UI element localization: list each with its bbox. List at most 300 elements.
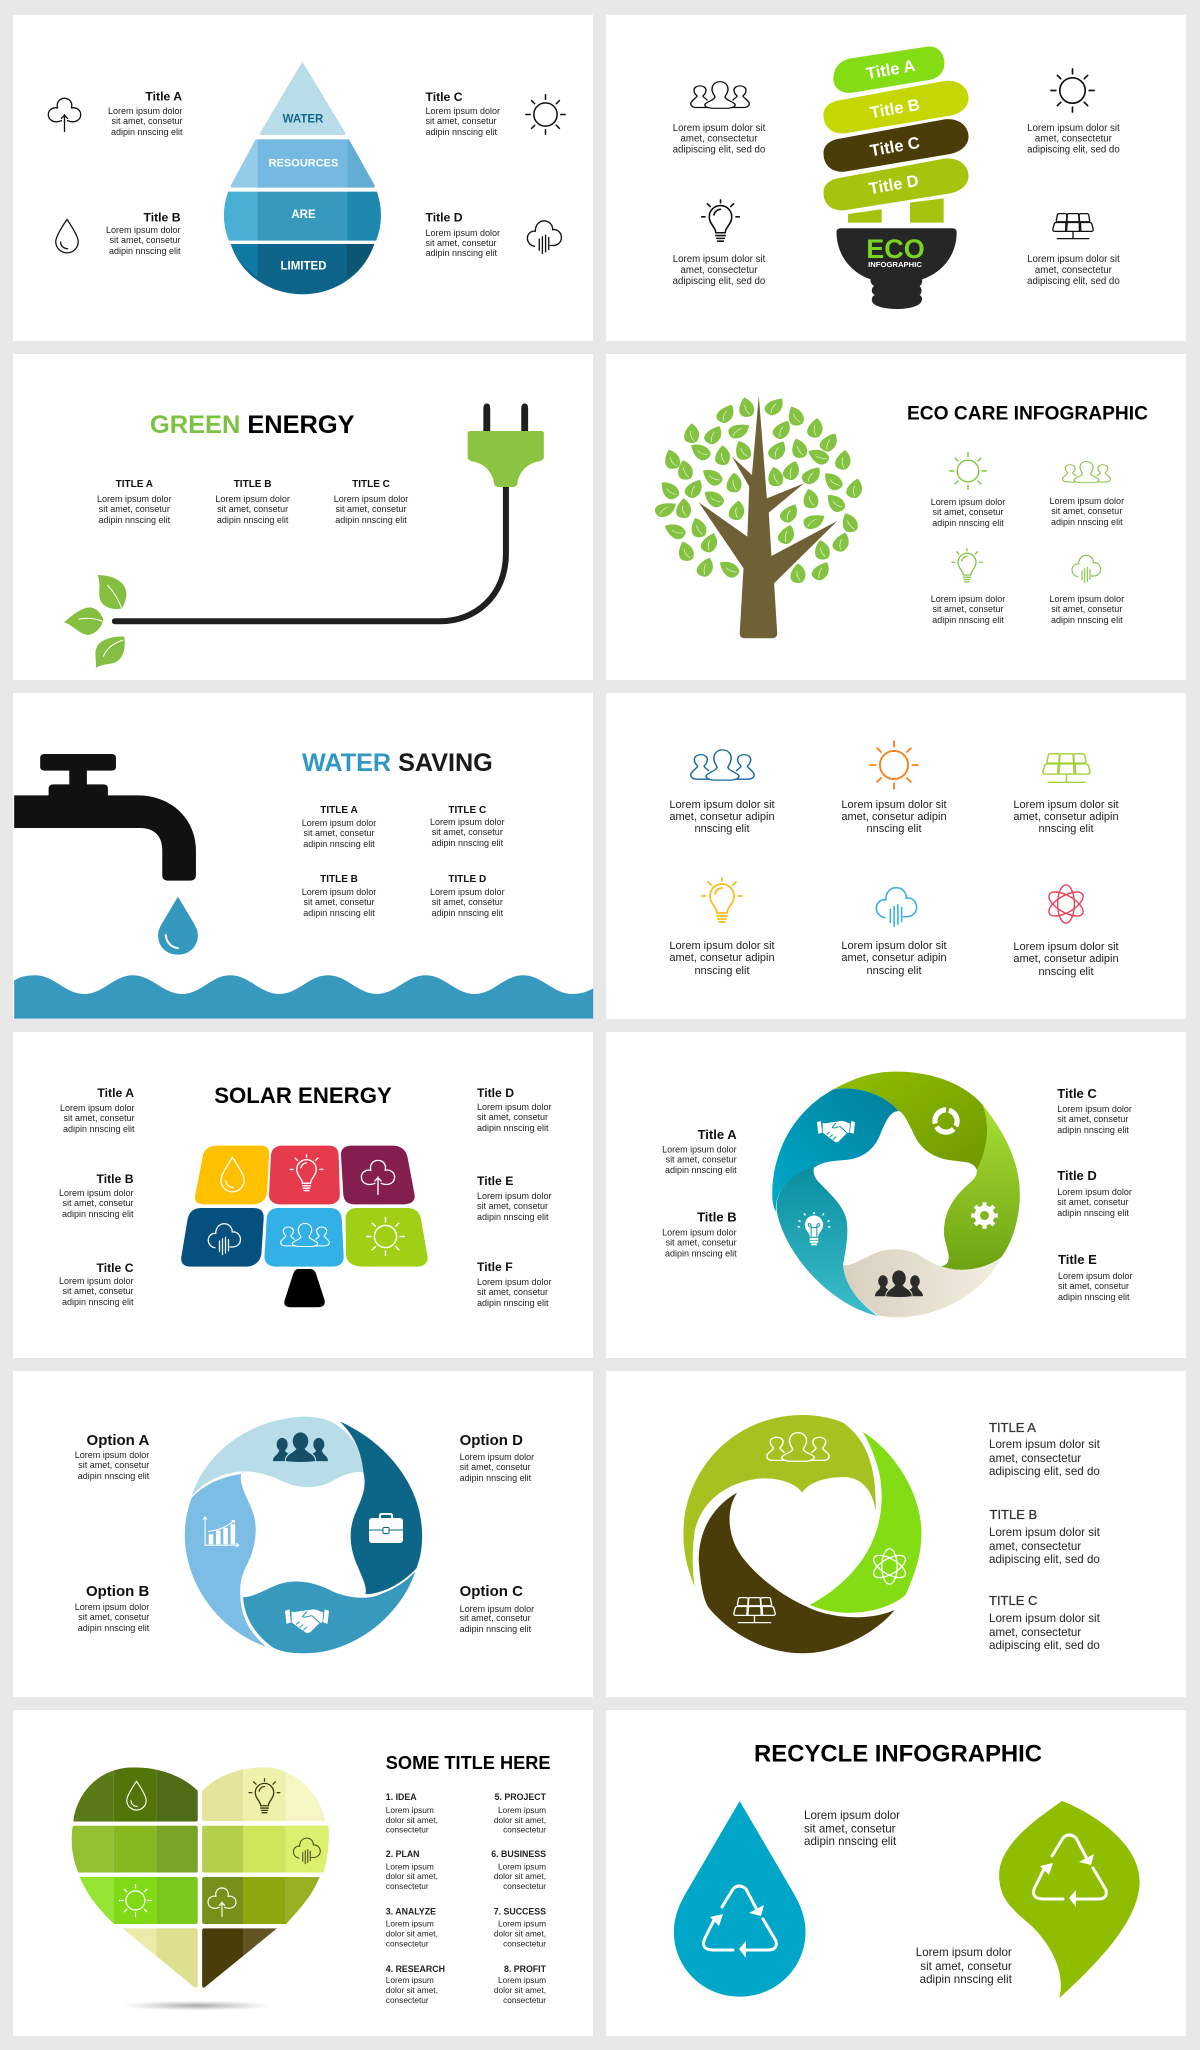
panel: colored icon grid	[606, 693, 1186, 1019]
list item 4: consectetur	[386, 1995, 429, 2005]
blue drop and green leaf shapes	[674, 1801, 1140, 1998]
icon: handshake	[817, 1121, 855, 1142]
panel: star ring	[606, 1032, 1186, 1358]
text: Title D	[1057, 1168, 1132, 1218]
text: Title A: sit amet, consetur	[99, 504, 170, 514]
list item 5: dolor sit amet,	[494, 1815, 546, 1825]
text: Title D: adipin nnscing elit	[477, 1123, 549, 1133]
list item 4: 4. RESEARCH	[386, 1964, 445, 1974]
panel: heart blocks	[13, 1710, 593, 2036]
text: Title B: sit amet, consetur	[109, 235, 181, 245]
text: Option B: sit amet, consetur	[78, 1612, 149, 1622]
text: Title D: adipin nnscing elit	[1057, 1208, 1129, 1218]
text: Title B	[662, 1210, 737, 1258]
list item 4	[386, 1964, 445, 2005]
text: Title A: Lorem ipsum dolor	[662, 1144, 737, 1154]
text: TITLE C	[989, 1593, 1101, 1652]
text: Title C: Lorem ipsum dolor	[334, 494, 408, 504]
text: Option D: Option D	[460, 1432, 523, 1449]
text: Title C	[59, 1261, 134, 1307]
text: Title A: adipin nnscing elit	[111, 127, 183, 137]
text: cloud block: adipin nnscing elit	[1051, 615, 1123, 625]
text: Option C: sit amet, consetur	[460, 1613, 531, 1623]
text: top left: amet, consectetur	[680, 134, 758, 145]
spiral bulb diagram: Title B	[869, 96, 921, 122]
text: Title B: TITLE B	[234, 479, 271, 490]
text: Title C	[334, 479, 408, 525]
spiral bulb diagram: ECO	[866, 234, 925, 264]
list item 3: consectetur	[386, 1938, 429, 1948]
icon: handshake	[285, 1609, 329, 1633]
text: Title E: Title E	[477, 1174, 513, 1188]
panel: eco care tree	[606, 354, 1186, 680]
text: drop caption: adipin nnscing elit	[804, 1835, 897, 1848]
text: TITLE A: TITLE A	[989, 1420, 1036, 1435]
text: Title B	[106, 210, 181, 256]
text: Title B: Title B	[96, 1172, 134, 1186]
text: people block: Lorem ipsum dolor	[1050, 496, 1124, 506]
text: Title C: sit amet, consetur	[62, 1286, 134, 1296]
text: bottom right: amet, consectetur	[1035, 265, 1113, 276]
four segment ring	[185, 1417, 422, 1653]
text: Title B: adipin nnscing elit	[62, 1209, 134, 1219]
text: Title B	[302, 874, 376, 918]
text: bottom left: Lorem ipsum dolor sit	[673, 254, 766, 265]
text: Title B: adipin nnscing elit	[217, 515, 289, 525]
text: bulb block: sit amet, consetur	[932, 604, 1004, 614]
text: Option B	[75, 1583, 150, 1633]
text: Title D: Title D	[1057, 1168, 1097, 1183]
text: Title A: adipin nnscing elit	[303, 839, 375, 849]
text: Option D: adipin nnscing elit	[460, 1473, 532, 1483]
text: Title C: Lorem ipsum dolor	[426, 106, 500, 116]
text: Title C: adipin nnscing elit	[62, 1297, 134, 1307]
icon: atom white	[870, 1549, 909, 1584]
text: Option D: sit amet, consetur	[460, 1462, 531, 1472]
text: Title A: TITLE A	[116, 479, 153, 490]
text: Title F	[477, 1260, 552, 1308]
icon: bulb outline	[702, 200, 739, 241]
icon: solar panel green	[1043, 754, 1090, 782]
list item 2: Lorem ipsum	[386, 1862, 434, 1872]
text: leaf caption: Lorem ipsum dolor	[916, 1946, 1012, 1959]
list item 7	[494, 1906, 546, 1948]
text: Title C: Lorem ipsum dolor	[430, 817, 505, 827]
icon: sun white	[367, 1218, 404, 1255]
text: Title A	[97, 479, 172, 525]
text: sun block: nnscing elit	[866, 823, 922, 835]
icon: people dark	[273, 1432, 328, 1462]
spiral bulb diagram: Title D	[868, 172, 920, 198]
text: solar block: nnscing elit	[1038, 823, 1094, 835]
heading: eco care infographic: ECO CARE INFOGRAPHIC	[907, 404, 1148, 424]
text: Title B	[59, 1172, 134, 1219]
text: bottom left: adipiscing elit, sed do	[673, 276, 765, 287]
text: atom block: Lorem ipsum dolor sit	[1013, 941, 1119, 953]
icon: cycle arrows	[932, 1107, 960, 1135]
icon: sun white	[119, 1884, 152, 1917]
icon: people blue	[691, 750, 754, 780]
panel: water saving faucet	[13, 693, 593, 1019]
text: Option A: sit amet, consetur	[78, 1460, 149, 1470]
text: people block: Lorem ipsum dolor sit	[669, 799, 775, 811]
list item 1: dolor sit amet,	[386, 1815, 438, 1825]
layered water drop diagram: LIMITED	[280, 260, 326, 272]
icon: cloud outline green	[1072, 555, 1101, 583]
spiral bulb diagram: Title C	[869, 134, 921, 160]
three segment ring with heart centre	[683, 1415, 921, 1653]
text: Title A	[60, 1086, 135, 1134]
icon: tree white	[361, 1160, 395, 1194]
list item 1: Lorem ipsum	[386, 1805, 434, 1815]
list item 2	[386, 1849, 438, 1891]
text: bottom left: amet, consectetur	[680, 265, 758, 276]
text: leaf caption: adipin nnscing elit	[920, 1973, 1013, 1986]
list item 3: Lorem ipsum	[386, 1918, 434, 1928]
text: Title B: sit amet, consetur	[217, 504, 288, 514]
icon: people white	[767, 1433, 829, 1461]
icon: cloud blue	[876, 888, 917, 926]
text: Title B: sit amet, consetur	[666, 1238, 737, 1248]
list item 5: Lorem ipsum	[498, 1805, 546, 1815]
text: Title D: Title D	[477, 1086, 514, 1100]
text: Option A	[75, 1432, 150, 1481]
icon: solid bulb	[798, 1212, 830, 1245]
text: Title E: adipin nnscing elit	[477, 1212, 549, 1222]
icon: sun orange	[870, 741, 918, 789]
list item 5	[494, 1792, 547, 1835]
icon: tree outline	[48, 98, 81, 131]
list item 1	[386, 1792, 438, 1835]
text: cloud block: amet, consetur adipin	[841, 952, 947, 964]
text: Title C	[1057, 1086, 1132, 1135]
list item 7: dolor sit amet,	[494, 1928, 546, 1938]
text: Option C: Lorem ipsum dolor	[460, 1604, 534, 1614]
text: Title D: Lorem ipsum dolor	[1057, 1187, 1132, 1197]
icon: people outline green	[1063, 461, 1110, 483]
text: Option D: Lorem ipsum dolor	[460, 1452, 534, 1462]
text: Title A: adipin nnscing elit	[63, 1124, 135, 1134]
text: Title A: sit amet, consetur	[63, 1113, 135, 1123]
list item 5: consectetur	[503, 1825, 546, 1835]
text: sun block: amet, consetur adipin	[841, 811, 947, 823]
text: drop caption: Lorem ipsum dolor	[804, 1809, 900, 1822]
icon: sun outline	[1051, 69, 1094, 112]
text: Title D: sit amet, consetur	[426, 238, 497, 248]
text: Title A: Title A	[698, 1127, 737, 1142]
text: TITLE C: amet, consectetur	[989, 1626, 1081, 1639]
list item 8: dolor sit amet,	[494, 1985, 546, 1995]
text: Title A: Lorem ipsum dolor	[302, 818, 376, 828]
icon: atom red	[1045, 885, 1087, 923]
text: Option B: Option B	[86, 1583, 149, 1600]
text: Title A: TITLE A	[320, 805, 358, 816]
text: Title E	[1058, 1252, 1133, 1302]
heading: water saving: WATER SAVING	[302, 749, 493, 777]
list item 6: Lorem ipsum	[498, 1862, 546, 1872]
list item 8: 8. PROFIT	[504, 1964, 547, 1974]
list item 7: 7. SUCCESS	[494, 1906, 546, 1916]
panel: green energy plug	[13, 354, 593, 680]
list item 2: dolor sit amet,	[386, 1871, 438, 1881]
text: Title D	[477, 1086, 552, 1133]
text: TITLE A: Lorem ipsum dolor sit	[989, 1438, 1101, 1451]
text: TITLE B: amet, consectetur	[989, 1540, 1081, 1553]
text: Title A	[108, 90, 183, 137]
text: sun block: Lorem ipsum dolor	[931, 497, 1005, 507]
text: Title A: sit amet, consetur	[111, 116, 183, 126]
text: TITLE A: amet, consectetur	[989, 1452, 1081, 1465]
text: Option D	[460, 1432, 534, 1483]
spiral bulb diagram	[823, 46, 969, 309]
icon: sun outline green	[950, 453, 986, 489]
text: Title C: sit amet, consetur	[432, 827, 503, 837]
text: Title D: TITLE D	[448, 874, 486, 885]
list item 1: consectetur	[386, 1825, 429, 1835]
text: TITLE B: TITLE B	[990, 1507, 1037, 1522]
heading: recycle infographic: RECYCLE INFOGRAPHIC	[754, 1740, 1042, 1768]
text: Title B: Lorem ipsum dolor	[662, 1228, 737, 1238]
icon: people white	[281, 1223, 329, 1247]
icon: recycle in drop	[704, 1886, 776, 1958]
text: Title D: Lorem ipsum dolor	[426, 228, 500, 238]
text: bulb block: Lorem ipsum dolor sit	[669, 940, 775, 952]
text: Title B: Title B	[143, 210, 181, 224]
text: Title A	[662, 1127, 737, 1175]
layered water drop diagram	[224, 62, 381, 294]
text: Title F: Lorem ipsum dolor	[477, 1277, 552, 1287]
panel: solar energy	[13, 1032, 593, 1358]
text: Title B: Title B	[697, 1210, 737, 1224]
text: Option C: adipin nnscing elit	[460, 1624, 532, 1634]
text: Title C: adipin nnscing elit	[432, 838, 504, 848]
layered water drop diagram: WATER	[283, 114, 324, 126]
text: sun block: sit amet, consetur	[932, 507, 1004, 517]
text: Title B: sit amet, consetur	[303, 897, 375, 907]
text: cloud block: nnscing elit	[866, 965, 922, 977]
faucet, drop and waves	[14, 754, 593, 1019]
text: Title A: sit amet, consetur	[666, 1154, 737, 1164]
text: Title D: Lorem ipsum dolor	[430, 887, 505, 897]
list item 3: dolor sit amet,	[386, 1928, 438, 1938]
text: Title B: TITLE B	[320, 874, 358, 885]
text: Title C: adipin nnscing elit	[1057, 1125, 1129, 1135]
text: TITLE B	[989, 1507, 1101, 1566]
text: cloud block: sit amet, consetur	[1051, 604, 1122, 614]
text: Option A: Lorem ipsum dolor	[75, 1450, 149, 1460]
text: top left: adipiscing elit, sed do	[673, 144, 765, 155]
text: solar block: Lorem ipsum dolor sit	[1013, 799, 1119, 811]
text: Title B: adipin nnscing elit	[109, 246, 181, 256]
icon: bulb dark	[249, 1779, 280, 1813]
list item 6	[491, 1849, 546, 1891]
icon: cloud dark	[293, 1838, 320, 1864]
text: Title C: sit amet, consetur	[335, 504, 407, 514]
list item 3: 3. ANALYZE	[386, 1906, 436, 1916]
text: Title C: TITLE C	[448, 805, 486, 816]
solar panel tiles and stand	[181, 1146, 428, 1307]
panel: recycle	[606, 1710, 1186, 2036]
text: solar block: amet, consetur adipin	[1013, 811, 1119, 823]
text: top right: amet, consectetur	[1035, 134, 1113, 145]
text: Title F: adipin nnscing elit	[477, 1298, 549, 1308]
text: Title B: adipin nnscing elit	[665, 1248, 737, 1258]
list item 6: dolor sit amet,	[494, 1871, 546, 1881]
text: Title E: sit amet, consetur	[477, 1201, 548, 1211]
list item 7: Lorem ipsum	[498, 1918, 546, 1928]
text: Title F: Title F	[477, 1260, 513, 1274]
list item 2: 2. PLAN	[386, 1849, 420, 1859]
list item 8: consectetur	[503, 1995, 546, 2005]
text: Title C: Lorem ipsum dolor	[59, 1276, 134, 1286]
text: Title C: Title C	[426, 90, 463, 104]
text: Title A: Lorem ipsum dolor	[97, 494, 172, 504]
list item 4: dolor sit amet,	[386, 1985, 438, 1995]
text: Title B: Lorem ipsum dolor	[302, 887, 376, 897]
list item 4: Lorem ipsum	[386, 1975, 434, 1985]
text: Title A: Lorem ipsum dolor	[60, 1103, 135, 1113]
text: top left: Lorem ipsum dolor sit	[673, 123, 766, 134]
panel: heart ring	[606, 1371, 1186, 1697]
icon: drop white	[221, 1158, 244, 1192]
text: top right: adipiscing elit, sed do	[1027, 144, 1120, 155]
layered water drop diagram: RESOURCES	[269, 158, 338, 170]
text: Option C	[460, 1583, 534, 1634]
text: Option A: adipin nnscing elit	[78, 1471, 150, 1481]
panel: eco light bulb	[606, 15, 1186, 341]
text: Title A	[302, 805, 376, 849]
text: Title F: sit amet, consetur	[477, 1287, 548, 1297]
text: atom block: nnscing elit	[1038, 966, 1094, 978]
icon: rain cloud outline	[527, 221, 561, 253]
text: Title D: sit amet, consetur	[432, 897, 503, 907]
text: TITLE A: adipiscing elit, sed do	[989, 1465, 1100, 1478]
icon: solar panel white	[734, 1598, 775, 1623]
text: Option C: Option C	[460, 1583, 523, 1600]
icon: sun outline	[526, 95, 565, 134]
text: Title B: Lorem ipsum dolor	[106, 225, 181, 235]
text: Title C: TITLE C	[352, 479, 390, 490]
text: drop caption: sit amet, consetur	[804, 1822, 896, 1836]
text: sun block: Lorem ipsum dolor sit	[841, 799, 947, 811]
icon: gear	[971, 1202, 998, 1229]
text: Title E: sit amet, consetur	[1058, 1281, 1129, 1291]
text: Title C: sit amet, consetur	[1057, 1114, 1128, 1124]
text: atom block: amet, consetur adipin	[1013, 953, 1119, 965]
plug, cord and leaves	[64, 403, 544, 668]
text: top right: Lorem ipsum dolor sit	[1027, 123, 1120, 134]
text: Title C: adipin nnscing elit	[426, 127, 498, 137]
icon: bar chart	[203, 1517, 239, 1547]
text: Title D: adipin nnscing elit	[432, 908, 504, 918]
text: cloud block: Lorem ipsum dolor sit	[841, 940, 947, 952]
text: bulb block: Lorem ipsum dolor	[931, 594, 1005, 604]
text: sun block: adipin nnscing elit	[932, 518, 1004, 528]
spiral bulb diagram: INFOGRAPHIC	[868, 260, 922, 269]
heading: solar energy: SOLAR ENERGY	[214, 1083, 392, 1108]
text: bottom right: adipiscing elit, sed do	[1027, 276, 1120, 287]
text: Title E	[477, 1174, 552, 1222]
heart made of colored blocks	[69, 1763, 332, 2011]
text: Option A: Option A	[87, 1432, 149, 1449]
text: Title C: Title C	[1057, 1086, 1097, 1101]
panel: options ring	[13, 1371, 593, 1697]
icon: bulb yellow	[702, 878, 742, 922]
heading: some title here: SOME TITLE HERE	[386, 1753, 551, 1773]
text: Title C	[426, 90, 500, 137]
icon: cloud white	[208, 1224, 240, 1254]
text: people block: nnscing elit	[694, 823, 750, 835]
text: TITLE C: adipiscing elit, sed do	[989, 1639, 1100, 1652]
text: people block: amet, consetur adipin	[669, 811, 775, 823]
icon: drop white	[127, 1781, 146, 1810]
list item 7: consectetur	[503, 1938, 546, 1948]
text: Title C: Title C	[96, 1261, 134, 1275]
text: Title D	[430, 874, 505, 918]
text: Title D: Lorem ipsum dolor	[477, 1102, 552, 1112]
text: Title C	[430, 805, 505, 848]
text: Title A: adipin nnscing elit	[99, 515, 171, 525]
tree with leaves	[652, 394, 865, 638]
text: Title D: adipin nnscing elit	[426, 248, 498, 258]
five segment star ring	[772, 1072, 1020, 1317]
icon: people outline	[691, 82, 749, 108]
icon: bulb outline green	[952, 549, 982, 582]
text: people block: adipin nnscing elit	[1051, 517, 1123, 527]
text: people block: sit amet, consetur	[1051, 506, 1122, 516]
text: Title B: adipin nnscing elit	[303, 908, 375, 918]
list item 6: 6. BUSINESS	[491, 1849, 546, 1859]
icon: water drop outline	[56, 220, 78, 253]
text: bulb block: adipin nnscing elit	[932, 615, 1004, 625]
icon: tree white	[208, 1888, 236, 1917]
text: bulb block: amet, consetur adipin	[669, 952, 775, 964]
text: Title D: sit amet, consetur	[477, 1112, 548, 1122]
text: bottom right: Lorem ipsum dolor sit	[1027, 254, 1120, 265]
icon: bulb white	[290, 1155, 323, 1191]
text: Title A: Title A	[145, 90, 182, 104]
text: Title A: Lorem ipsum dolor	[108, 106, 183, 116]
list item 8: Lorem ipsum	[498, 1975, 546, 1985]
icon: briefcase	[369, 1514, 403, 1543]
text: Title A: Title A	[97, 1086, 134, 1100]
text: Title A: sit amet, consetur	[303, 828, 375, 838]
text: Option B: adipin nnscing elit	[78, 1623, 150, 1633]
list item 5: 5. PROJECT	[495, 1792, 547, 1802]
icon: recycle in leaf	[1034, 1835, 1106, 1907]
text: leaf caption: sit amet, consetur	[920, 1960, 1012, 1973]
spiral bulb diagram: Title A	[865, 57, 917, 83]
text: Title B: Lorem ipsum dolor	[59, 1188, 134, 1198]
list item 1: 1. IDEA	[386, 1792, 417, 1802]
icon: people dark	[875, 1270, 923, 1297]
text: Title D: sit amet, consetur	[1057, 1197, 1128, 1207]
text: TITLE A	[989, 1420, 1101, 1478]
text: cloud block: Lorem ipsum dolor	[1050, 594, 1124, 604]
icon: solar panel outline	[1053, 214, 1093, 239]
text: TITLE B: adipiscing elit, sed do	[989, 1553, 1100, 1566]
text: Title E: Lorem ipsum dolor	[477, 1191, 552, 1201]
list item 2: consectetur	[386, 1881, 429, 1891]
text: Title B: sit amet, consetur	[62, 1198, 134, 1208]
list item 8	[494, 1964, 547, 2005]
layered water drop diagram: ARE	[291, 209, 316, 221]
list item 6: consectetur	[503, 1881, 546, 1891]
text: Title E: adipin nnscing elit	[1058, 1292, 1130, 1302]
text: bulb block: nnscing elit	[694, 965, 750, 977]
list item 3	[386, 1906, 438, 1948]
text: Title C: sit amet, consetur	[426, 116, 497, 126]
